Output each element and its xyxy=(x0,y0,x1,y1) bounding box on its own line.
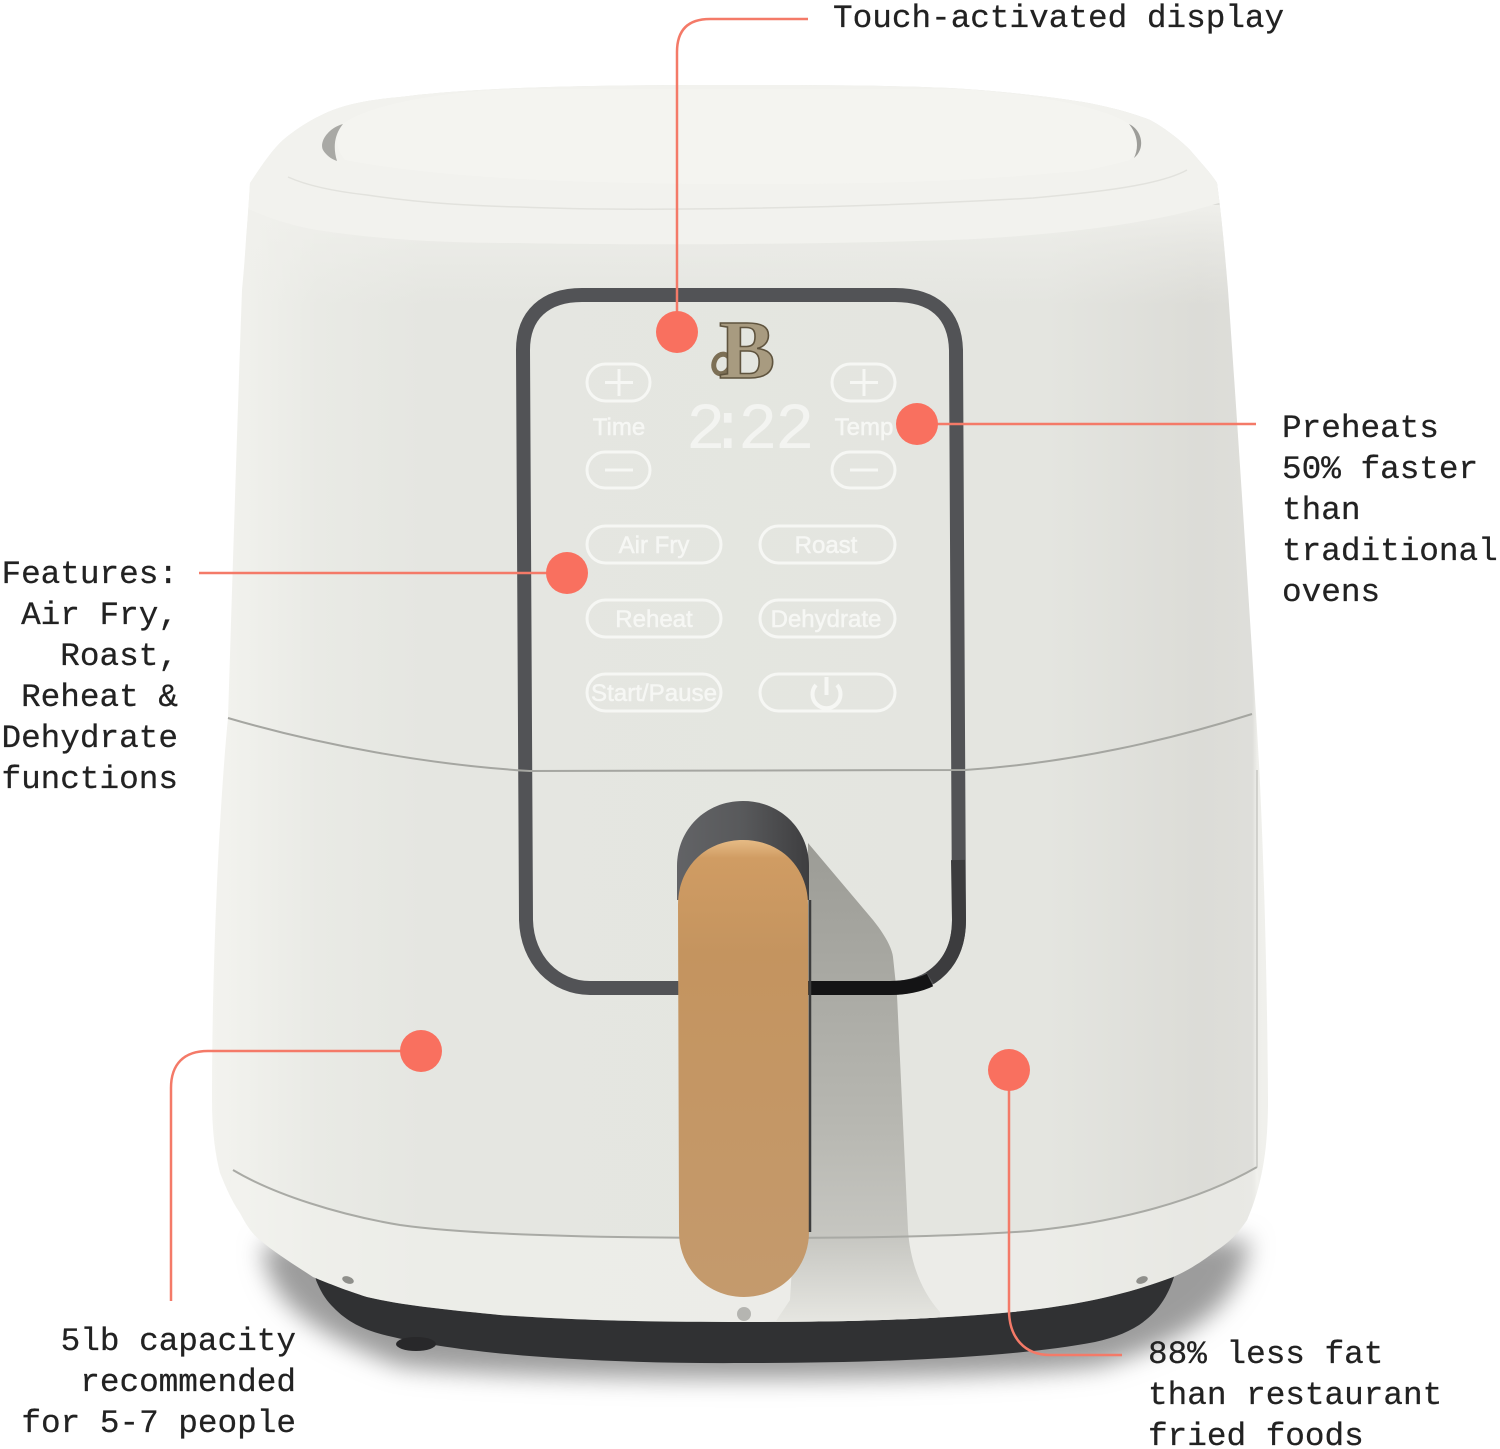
air fry button: Air Fry xyxy=(619,532,689,559)
power button xyxy=(760,674,895,711)
caption: Reheat & xyxy=(21,679,178,716)
caption: functions xyxy=(1,761,178,798)
lid xyxy=(288,89,1187,209)
lower band highlight xyxy=(282,1170,1254,1322)
base holes xyxy=(341,1275,1149,1321)
handle dark side edge xyxy=(809,900,811,1232)
time minus button xyxy=(587,452,650,488)
control panel xyxy=(587,304,895,711)
dot xyxy=(896,403,938,445)
darker right border xyxy=(930,860,959,978)
leader line xyxy=(1009,1075,1122,1355)
leader line xyxy=(925,423,1256,425)
logo: B xyxy=(719,304,775,397)
start pause button: Start/Pause xyxy=(591,680,717,707)
lower seam xyxy=(233,1167,1257,1238)
callout: touch-activated display xyxy=(656,0,1284,353)
dark base xyxy=(314,1268,1176,1363)
air fryer product xyxy=(200,50,1300,1379)
caption: Preheats xyxy=(1282,410,1439,447)
handle cast shadow xyxy=(770,843,940,1330)
caption: ovens xyxy=(1282,574,1380,611)
caption: than xyxy=(1282,492,1360,529)
roast button: Roast xyxy=(795,532,858,559)
temp minus button xyxy=(832,452,895,488)
caption: Air Fry, xyxy=(21,597,178,634)
dot xyxy=(400,1030,442,1072)
dot xyxy=(988,1049,1030,1091)
upper collar xyxy=(308,85,1220,205)
main body xyxy=(212,85,1268,1322)
caption: for 5-7 people xyxy=(21,1405,296,1442)
reheat button: Reheat xyxy=(615,606,693,633)
caption: than restaurant xyxy=(1148,1377,1442,1414)
caption: Dehydrate xyxy=(1,720,178,757)
time plus button xyxy=(587,364,650,401)
collar fade xyxy=(1060,205,1224,258)
leader line xyxy=(199,572,560,574)
callout: capacity xyxy=(21,1030,442,1442)
time label: Time xyxy=(593,414,645,441)
callout: preheats faster xyxy=(896,403,1498,611)
dot xyxy=(656,311,698,353)
handle xyxy=(677,801,810,1297)
temp plus button xyxy=(832,364,895,401)
right lid slot xyxy=(1129,124,1141,158)
roast button xyxy=(760,526,895,563)
handle dark cap xyxy=(677,801,809,900)
digital display: 2:22 xyxy=(686,393,815,468)
caption: recommended xyxy=(80,1364,296,1401)
leader line xyxy=(677,19,808,320)
control panel border xyxy=(523,295,959,988)
black border in handle shadow xyxy=(808,980,930,988)
caption: Roast, xyxy=(60,638,178,675)
caption: 5lb capacity xyxy=(61,1323,296,1360)
copper handle xyxy=(678,840,809,1297)
temp label: Temp xyxy=(835,414,893,441)
caption: Touch-activated display xyxy=(833,0,1284,37)
callout: features xyxy=(1,552,588,798)
caption: traditional xyxy=(1282,533,1498,570)
caption: 50% faster xyxy=(1282,451,1478,488)
left lid slot xyxy=(322,124,343,161)
caption: 88% less fat xyxy=(1148,1336,1383,1373)
leader line xyxy=(171,1051,415,1301)
dot xyxy=(546,552,588,594)
start pause button xyxy=(587,674,721,711)
dehydrate button: Dehydrate xyxy=(771,606,881,633)
rubber foot xyxy=(396,1337,436,1351)
ground shadow xyxy=(262,1240,1250,1379)
clipped body shading xyxy=(254,85,1254,1340)
lid plate xyxy=(337,89,1136,184)
drawer seam xyxy=(228,714,1252,771)
callout: less fat xyxy=(988,1049,1442,1449)
reheat button xyxy=(587,600,721,637)
lid ring edge xyxy=(288,170,1187,209)
air fry button xyxy=(587,526,721,563)
drawer right edge xyxy=(1256,770,1258,1167)
caption: Features: xyxy=(1,556,178,593)
dehydrate button xyxy=(760,600,895,637)
